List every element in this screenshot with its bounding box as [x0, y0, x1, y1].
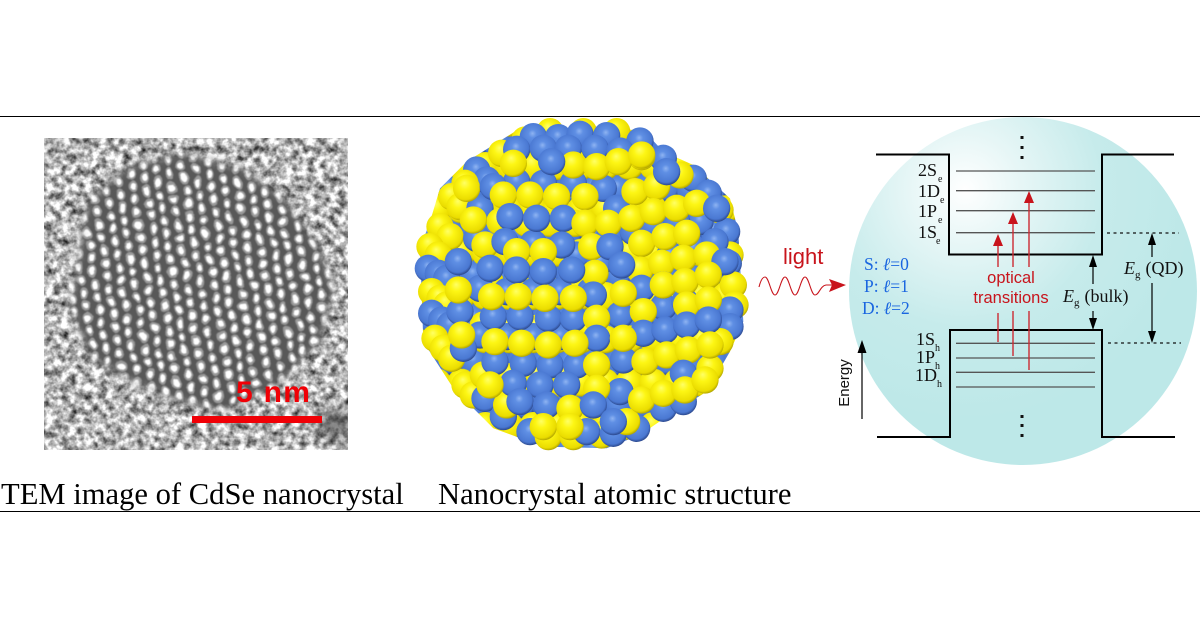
Eg QD label: (QD): [1146, 258, 1184, 279]
dotted QD levels: [1107, 233, 1181, 343]
TEM noisy background: [44, 138, 348, 450]
Eg bulk label: g: [1074, 297, 1080, 309]
Eg bulk label: (bulk): [1084, 286, 1128, 307]
energy axis label: Energy: [836, 359, 853, 407]
angular momentum legend: P: ℓ=1: [864, 276, 909, 296]
hole level labels: 1S: [916, 329, 935, 349]
electron level subscripts: [936, 174, 945, 247]
scale bar: [192, 416, 322, 423]
bottom rule: [0, 510, 1200, 512]
panel: TEM image of CdSe nanocrystal: [44, 138, 354, 450]
light label: light: [783, 244, 823, 269]
Eg QD label: g: [1135, 269, 1141, 281]
angular momentum legend: D: ℓ=2: [862, 298, 910, 318]
angular momentum legend: S: ℓ=0: [864, 254, 909, 274]
angular momentum legend: [862, 254, 910, 318]
panel: energy level diagram: [759, 117, 1197, 465]
Eg bulk arrows: [1089, 255, 1097, 330]
electron level subscripts: e: [940, 195, 945, 206]
hole level subscripts: h: [935, 343, 940, 354]
optical transitions label: optical: [987, 269, 1035, 287]
valence band well: [877, 330, 1175, 437]
hole level labels: [915, 329, 937, 385]
caption: atomic structure: Nanocrystal atomic structure: [438, 477, 791, 511]
hole level subscripts: h: [937, 379, 942, 390]
rim and rear atoms: [415, 118, 749, 450]
Eg QD label: E: [1123, 258, 1135, 278]
middle filler atoms: [463, 168, 729, 390]
electron level subscripts: e: [936, 236, 941, 247]
hole level subscripts: h: [935, 361, 940, 372]
electron energy levels: [956, 171, 1095, 233]
back fill of packed atoms: [420, 128, 743, 448]
electron level subscripts: e: [938, 215, 943, 226]
electron level labels: 2S: [918, 160, 937, 180]
electron level labels: [918, 160, 940, 242]
scale label: 5 nm: [236, 376, 311, 409]
Eg bulk label: E: [1062, 286, 1074, 306]
front atom rows: [445, 141, 739, 440]
hole level labels: 1D: [915, 365, 937, 385]
panel: nanocrystal atomic structure: [415, 118, 749, 450]
caption: TEM image: TEM image of CdSe nanocrystal: [1, 477, 404, 511]
ellipsis bottom: [1020, 415, 1024, 437]
conduction band well: [876, 154, 1174, 254]
background sphere: [849, 117, 1197, 465]
optical transitions label: [973, 269, 1049, 307]
electron level subscripts: e: [938, 174, 943, 185]
Eg QD arrows: [1148, 233, 1156, 343]
dark corner blotch: [318, 408, 354, 440]
ellipsis top: [1020, 136, 1024, 159]
hole level labels: 1P: [916, 347, 935, 367]
optical transition arrows: [993, 191, 1034, 370]
hole energy levels: [956, 343, 1095, 387]
hole level subscripts: [935, 343, 942, 390]
electron level labels: 1S: [918, 222, 937, 242]
nanocrystal lattice: [65, 148, 340, 416]
top rule: [0, 116, 1200, 118]
energy axis arrow: [858, 340, 866, 419]
electron level labels: 1D: [918, 181, 940, 201]
optical transitions label: transitions: [973, 289, 1049, 307]
electron level labels: 1P: [918, 201, 937, 221]
light wave arrow: [759, 277, 846, 295]
